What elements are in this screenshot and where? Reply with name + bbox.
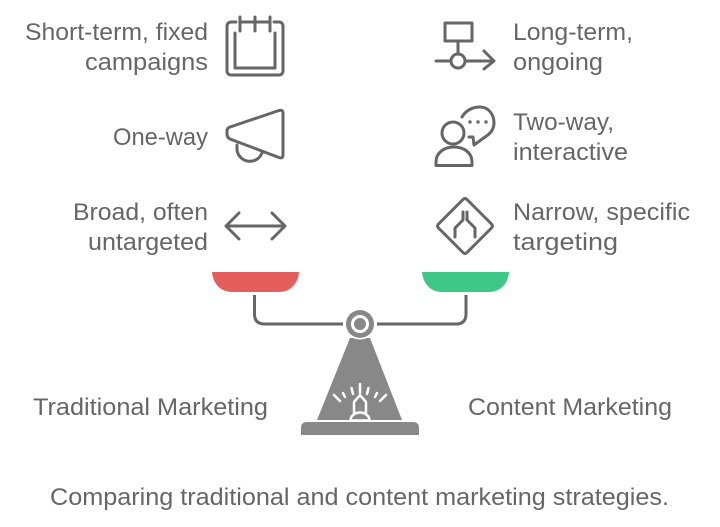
label: broad untargeted: untargeted [88, 229, 208, 256]
stand [317, 338, 402, 420]
label: narrow specific targeting [513, 199, 690, 256]
red pan [212, 272, 299, 292]
label: one-way: One-way [113, 124, 208, 151]
icon: double arrow [226, 213, 285, 239]
label: short-term campaigns [25, 19, 208, 76]
label: narrow specific targeting: targeting [513, 229, 618, 256]
label: broad untargeted [73, 199, 208, 256]
icon: calendar [227, 17, 283, 75]
label: long-term ongoing: Long-term, [513, 19, 633, 46]
icon: process flow [436, 23, 494, 69]
label: two-way interactive: Two-way, [513, 109, 614, 136]
caption: Comparing traditional and content marketing strategies. [50, 484, 669, 511]
label: long-term ongoing [513, 19, 633, 76]
green pan [422, 272, 509, 292]
label: traditional marketing: Traditional Marketing [33, 394, 268, 421]
icon: megaphone [227, 110, 283, 161]
pivot [344, 308, 376, 340]
icon: person with speech bubble [436, 107, 494, 166]
label: broad untargeted: Broad, often [73, 199, 208, 226]
alert light [334, 384, 386, 420]
label: short-term campaigns: campaigns [85, 49, 208, 76]
label: narrow specific targeting: Narrow, specific [513, 199, 690, 226]
beam [254, 295, 466, 324]
scale: balance [212, 272, 509, 435]
label: long-term ongoing: ongoing [513, 49, 603, 76]
base [301, 422, 419, 435]
label: two-way interactive [513, 109, 628, 166]
label: two-way interactive: interactive [513, 139, 628, 166]
label: short-term campaigns: Short-term, fixed [25, 19, 208, 46]
label: content marketing: Content Marketing [468, 394, 672, 421]
icon: road merge sign [438, 198, 492, 254]
